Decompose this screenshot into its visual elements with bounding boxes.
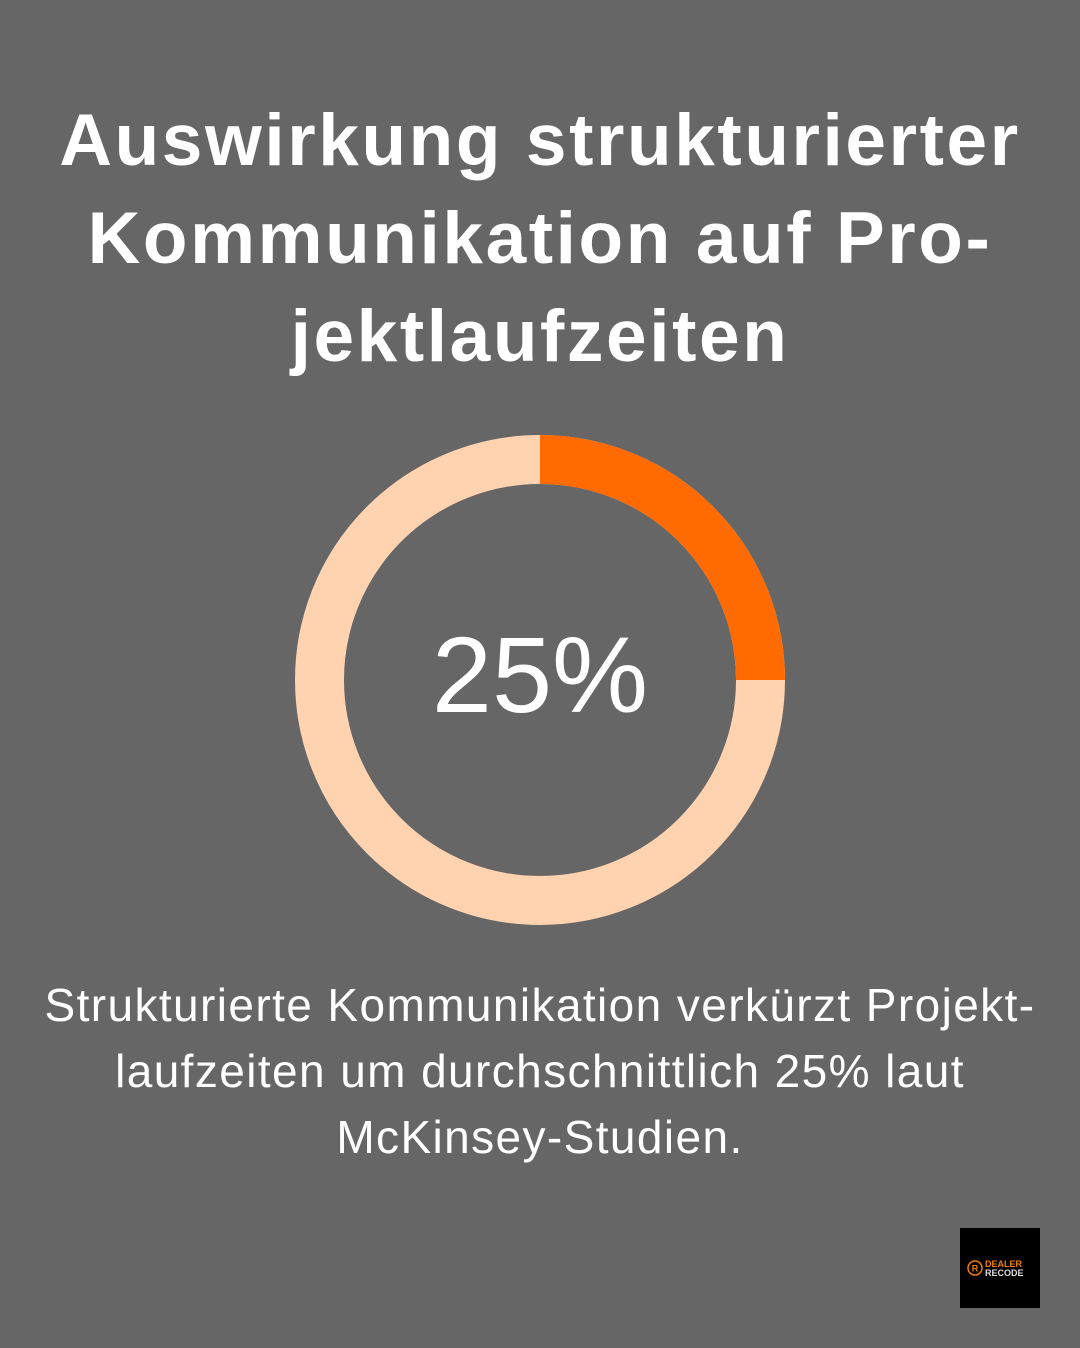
logo: R [972,1264,979,1274]
title: Auswirkung strukturierter [59,100,1021,181]
logo: RECODE [985,1268,1024,1278]
description text: McKinsey-Studien. [336,1111,744,1163]
logo: DEALER [985,1259,1023,1269]
donut chart: 25% [432,614,648,735]
description text [44,979,1035,1163]
title: Kommunikation auf Pro- [88,198,992,279]
title: jektlaufzeiten [291,296,789,377]
description text: laufzeiten um durchschnittlich 25% laut [115,1045,965,1097]
description text: Strukturierte Kommunikation verkürzt Projekt- [44,979,1035,1031]
logo [960,1228,1040,1308]
title [59,100,1021,377]
